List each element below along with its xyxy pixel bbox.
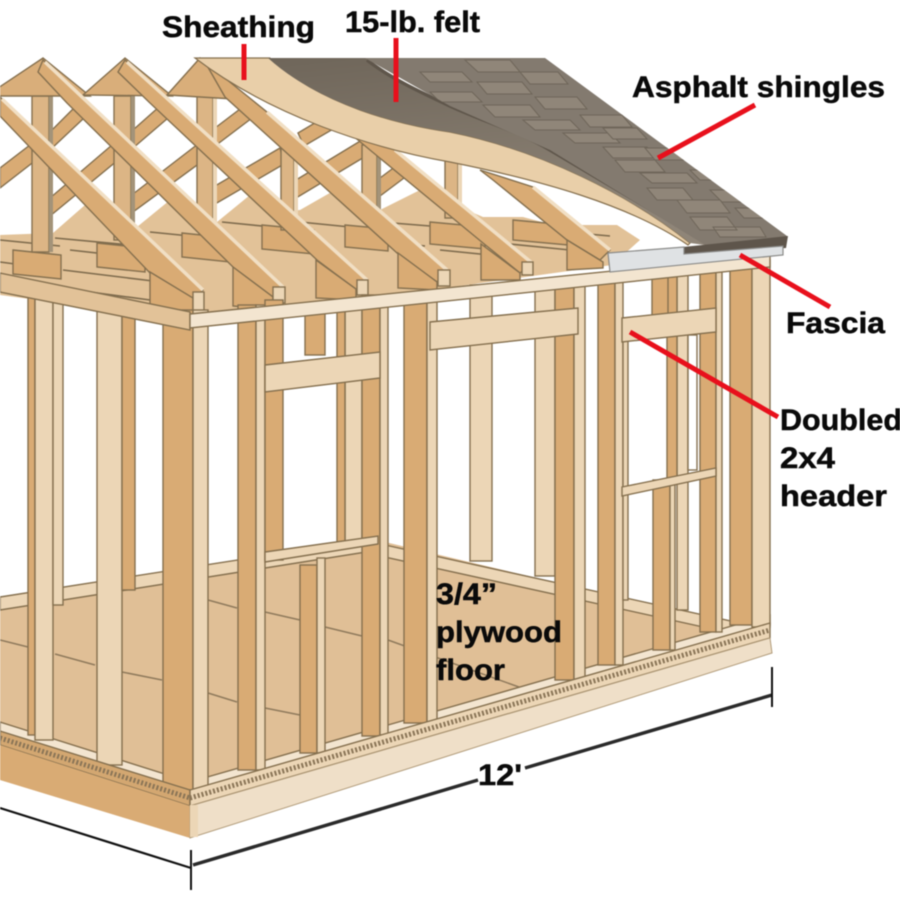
label: plywood floor: 3/4” — [436, 578, 497, 611]
label: plywood floor: floor — [436, 654, 505, 687]
far wall studs — [305, 265, 697, 610]
rafter end blocks — [150, 240, 603, 320]
doubled headers — [265, 308, 716, 392]
label: doubled 2x4 header: header — [780, 480, 887, 513]
label: 12 foot dimension: 12' — [478, 759, 522, 792]
diagonal braces — [0, 105, 412, 216]
far wall plates — [0, 537, 735, 634]
width dimension line — [0, 808, 191, 868]
rafters — [0, 60, 610, 300]
asphalt shingles — [365, 58, 788, 255]
roof sheathing — [195, 58, 690, 245]
label: felt: 15-lb. felt — [345, 6, 480, 39]
label: doubled 2x4 header: Doubled — [780, 404, 900, 437]
king posts — [32, 96, 462, 252]
sill and rim joist — [0, 623, 772, 838]
fascia board — [608, 246, 783, 272]
top plates — [0, 255, 770, 330]
dimension lines — [0, 667, 772, 890]
sole plates — [0, 615, 770, 792]
red leader lines — [244, 38, 830, 417]
ceiling joists and blocking — [0, 190, 640, 322]
label: sheathing: Sheathing — [162, 11, 315, 44]
label: asphalt shingles: Asphalt shingles — [632, 71, 885, 104]
label: doubled 2x4 header — [780, 404, 900, 513]
side wall studs and window framing — [238, 260, 770, 770]
roofing felt — [268, 58, 712, 246]
roof truss webs — [0, 58, 640, 322]
label: fascia: Fascia — [786, 307, 885, 340]
gable triangles — [0, 58, 250, 100]
label: plywood floor — [436, 578, 562, 687]
labels — [162, 6, 900, 792]
window sills — [265, 468, 716, 562]
label: plywood floor: plywood — [436, 616, 562, 649]
label: doubled 2x4 header: 2x4 — [780, 442, 835, 475]
gable end wall studs — [28, 285, 208, 790]
length dimension line — [193, 695, 772, 865]
plywood floor — [0, 542, 770, 800]
